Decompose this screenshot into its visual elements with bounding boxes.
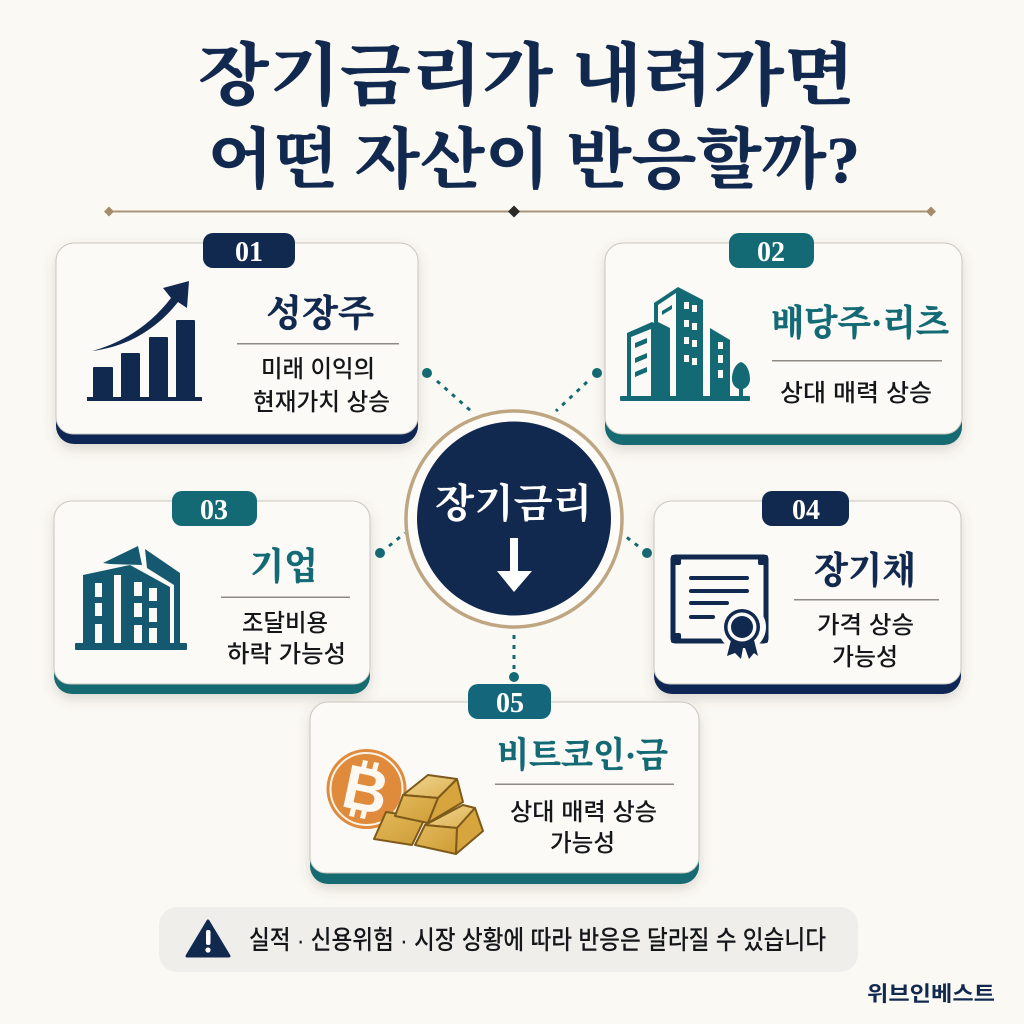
panel: long-term bonds [654, 491, 961, 694]
description [817, 612, 914, 671]
description: 조달비용 [242, 610, 328, 637]
heading: 장기채 [814, 550, 916, 592]
badge 03 [172, 491, 257, 526]
description: 현재가치 상승 [253, 389, 390, 416]
icon: bitcoin coin and gold bars [326, 749, 483, 854]
badge 02: 02 [757, 237, 785, 268]
badge 03: 03 [200, 495, 228, 526]
bottom left bar [374, 812, 425, 845]
badge 01: 01 [235, 237, 263, 268]
description: 가능성 [550, 830, 615, 857]
description [253, 356, 390, 416]
badge 04 [762, 491, 849, 526]
top bar [403, 775, 457, 798]
description [227, 610, 346, 668]
center circle: long-term rates down: 장기금리 [435, 481, 592, 526]
heading: 비트코인·금 [497, 736, 668, 775]
panel: bitcoin and gold [310, 684, 699, 884]
description: 상대 매력 상승 [510, 799, 657, 826]
warning note [159, 907, 858, 972]
icon: rising bar chart [87, 281, 202, 401]
icon: bond certificate [671, 555, 768, 659]
title: 장기금리가 내려가면 [198, 38, 855, 114]
description: 미래 이익의 [261, 356, 375, 383]
arrow: down [497, 538, 532, 592]
title [198, 38, 860, 197]
panel: dividend stocks and REITs [605, 233, 962, 445]
heading: 성장주 [266, 293, 374, 335]
heading: 기업 [250, 546, 318, 588]
badge 05 [468, 684, 551, 719]
connector lines [375, 368, 652, 682]
icon: bitcoin coin and gold bars: B [336, 752, 395, 829]
description [510, 799, 657, 857]
heading: 배당주·리츠 [771, 303, 949, 343]
note text: 실적 · 신용위험 · 시장 상황에 따라 반응은 달라질 수 있습니다 [249, 925, 826, 955]
brand name: 위브인베스트 [867, 983, 995, 1006]
badge 02 [729, 233, 814, 268]
center circle: long-term rates down [406, 411, 622, 627]
badge 04: 04 [792, 495, 820, 526]
description: 가능성 [832, 644, 898, 671]
bottom right bar [425, 805, 475, 828]
panel: growth stocks [56, 233, 418, 444]
description: 가격 상승 [817, 612, 914, 639]
icon: office buildings and tree [620, 287, 750, 401]
title: 어떤 자산이 반응할까? [208, 124, 860, 197]
badge 05: 05 [496, 688, 524, 719]
panel: corporations [54, 491, 370, 694]
description: 상대 매력 상승 [780, 380, 932, 407]
title divider [104, 206, 936, 218]
badge 01 [203, 233, 295, 268]
icon: warning triangle [187, 921, 229, 956]
icon: corporate building [75, 546, 187, 650]
description: 하락 가능성 [227, 641, 346, 668]
